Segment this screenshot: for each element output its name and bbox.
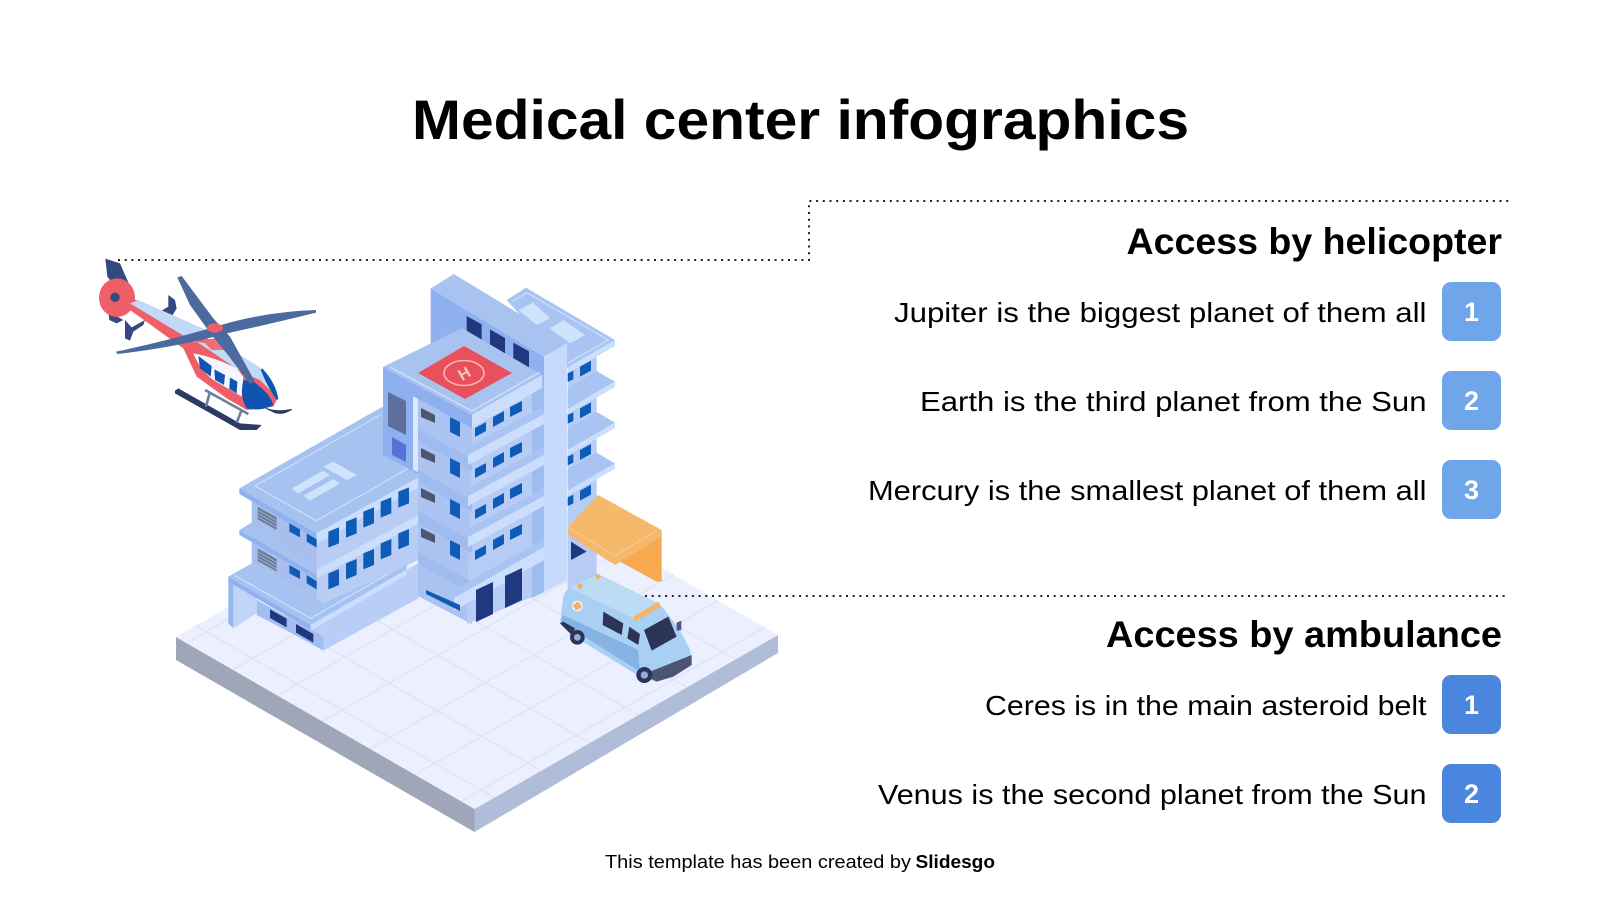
item 2 badge xyxy=(1442,371,1501,430)
roof with helipad: H xyxy=(455,364,474,385)
item 2 text: Venus is the second planet from the Sun xyxy=(878,779,1426,810)
connector: helicopter dotted line xyxy=(118,201,1510,260)
item 2 text: Earth is the third planet from the Sun xyxy=(920,386,1426,417)
item 3 badge: 3 xyxy=(1464,475,1479,505)
footer credit: Slidesgo xyxy=(916,851,995,872)
ground platform xyxy=(176,463,778,832)
ambulance xyxy=(560,574,692,683)
item 3 badge xyxy=(1442,460,1501,519)
item 1 badge xyxy=(1442,675,1501,734)
building: rear section and tall wall xyxy=(431,274,615,593)
footer credit: This template has been created by xyxy=(605,851,912,872)
item 1 text: Ceres is in the main asteroid belt xyxy=(985,690,1427,721)
item 1 badge xyxy=(1442,282,1501,341)
helicopter xyxy=(99,259,316,430)
item 2 badge xyxy=(1442,764,1501,823)
entrance canopy xyxy=(568,495,662,582)
item 2 badge: 2 xyxy=(1464,779,1479,809)
heading: access by helicopter: Access by helicopter xyxy=(1126,221,1502,262)
item 1 badge: 1 xyxy=(1464,297,1479,327)
building: central tower xyxy=(383,328,567,624)
section: access by ambulance xyxy=(878,614,1502,823)
roof with helipad xyxy=(383,328,542,428)
heading: access by ambulance: Access by ambulance xyxy=(1106,614,1502,655)
connector: ambulance dotted line xyxy=(645,595,1508,597)
item 2 badge: 2 xyxy=(1464,386,1479,416)
item 3 text: Mercury is the smallest planet of them all xyxy=(868,475,1426,506)
building: left wing xyxy=(228,407,418,651)
illustration: isometric medical center xyxy=(99,259,778,832)
item 1 text: Jupiter is the biggest planet of them all xyxy=(894,297,1426,328)
section: access by helicopter xyxy=(868,221,1502,519)
title: Medical center infographics xyxy=(412,88,1189,151)
item 1 badge: 1 xyxy=(1464,690,1479,720)
